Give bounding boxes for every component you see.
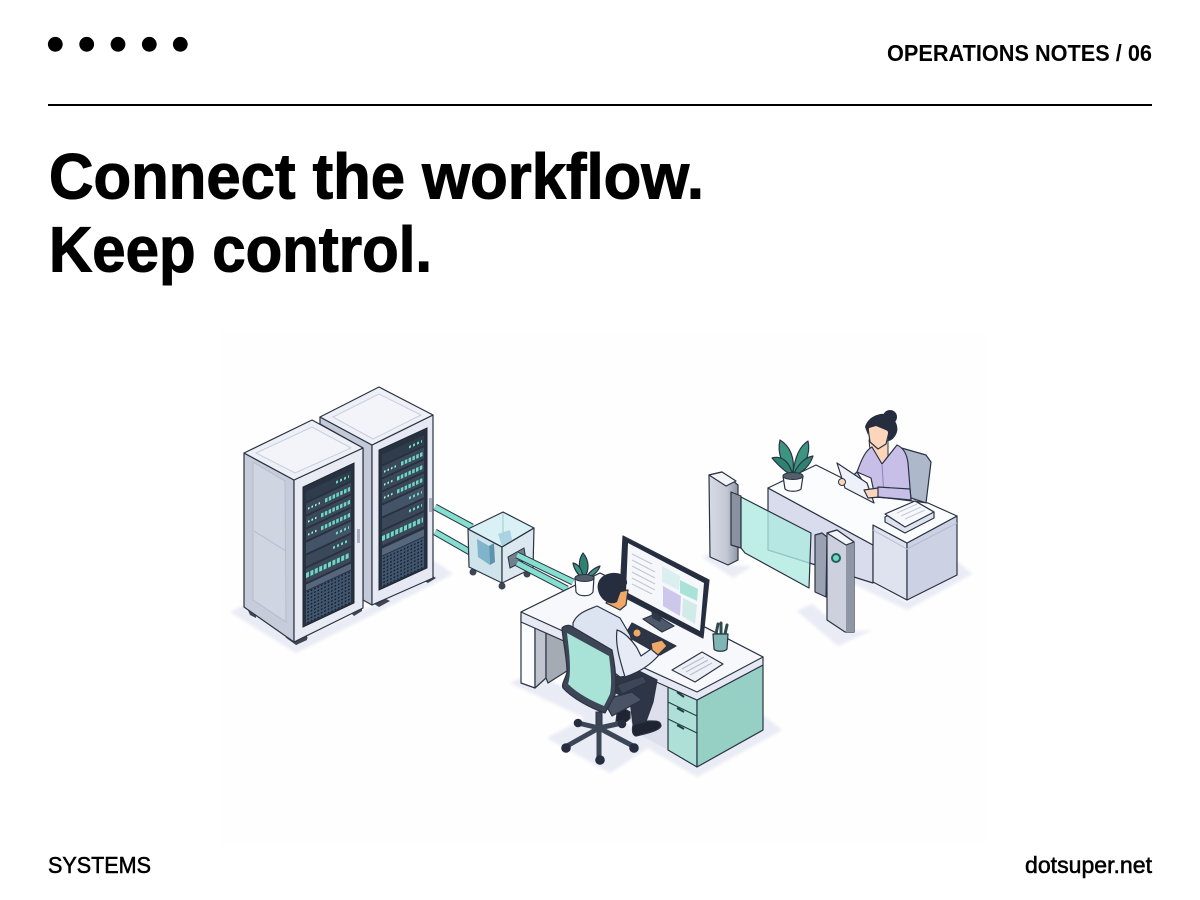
junction box bbox=[468, 512, 534, 590]
desk pedestal bbox=[668, 665, 763, 767]
footer right label: dotsuper.net bbox=[1025, 852, 1153, 878]
header label: OPERATIONS NOTES / 06 bbox=[887, 40, 1152, 66]
shirt sleeve bbox=[617, 630, 659, 677]
cables to desk bbox=[517, 555, 573, 589]
head bbox=[598, 573, 628, 610]
header dots bbox=[48, 37, 188, 52]
hands bbox=[633, 629, 667, 655]
plant on reception desk bbox=[772, 440, 813, 491]
desk legs and back panel bbox=[521, 615, 668, 750]
plant on desk bbox=[573, 553, 600, 596]
server rack: back bbox=[320, 387, 436, 607]
seated man bbox=[561, 573, 667, 765]
desktop bbox=[521, 573, 763, 700]
pen cup bbox=[713, 623, 728, 651]
reception desk with woman bbox=[768, 410, 957, 600]
woman bbox=[857, 410, 911, 500]
title: Connect the workflow. bbox=[49, 140, 704, 212]
keyboard bbox=[625, 623, 676, 655]
right gate post bbox=[827, 530, 854, 632]
woman's chair bbox=[898, 447, 931, 503]
cables to junction box bbox=[435, 507, 472, 552]
notebook bbox=[672, 652, 723, 682]
title: Keep control. bbox=[49, 214, 432, 286]
footer left label: SYSTEMS bbox=[48, 852, 151, 878]
paper stack bbox=[885, 501, 934, 533]
turnstile gate bbox=[709, 472, 854, 632]
trousers and shoes bbox=[610, 663, 661, 736]
server rack: front bbox=[244, 420, 363, 645]
office chair bbox=[562, 625, 647, 716]
monitor bbox=[620, 536, 709, 638]
illustration: isometric workplace bbox=[230, 387, 972, 777]
workstation desk bbox=[521, 536, 763, 767]
glass gate panel bbox=[741, 497, 811, 588]
chair base bbox=[561, 712, 639, 765]
floor shadows bbox=[230, 553, 972, 777]
shirt bbox=[573, 606, 638, 677]
reception desk bbox=[768, 465, 957, 600]
left gate post bbox=[709, 472, 741, 565]
small gate post bbox=[815, 533, 827, 597]
title bbox=[49, 140, 704, 286]
paper held by woman bbox=[837, 463, 911, 503]
gate sensor bbox=[832, 554, 840, 562]
